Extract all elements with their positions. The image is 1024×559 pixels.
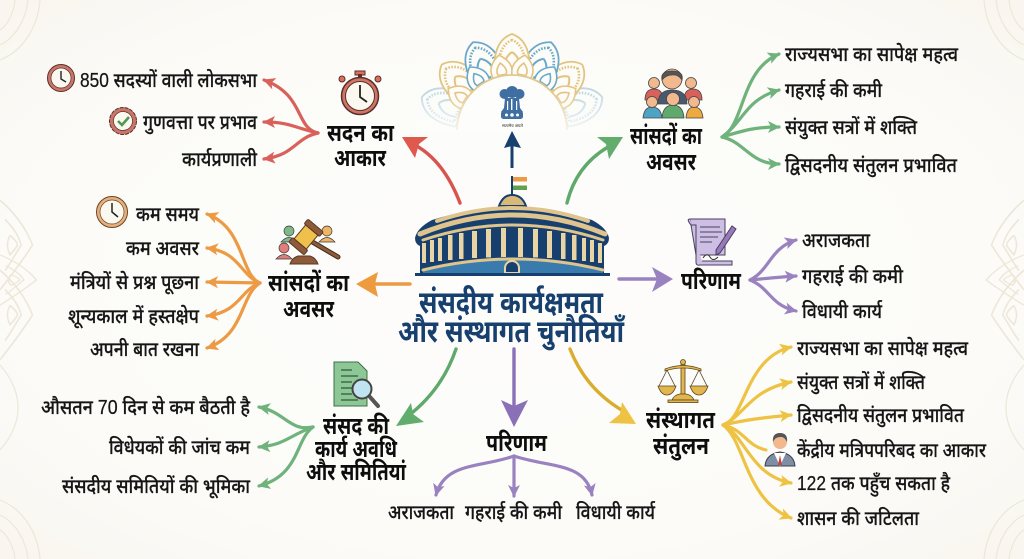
icon: stopwatch (339, 71, 381, 114)
icon: scales (658, 360, 708, 402)
item: संयुक्त सत्रों में शक्ति (797, 370, 925, 395)
arrow: to MP opportunities left (356, 272, 410, 297)
item: कम अवसर (126, 238, 200, 260)
arrow: up navy (504, 131, 521, 168)
icon: scroll and pen (688, 219, 736, 265)
icon: group of people (643, 69, 703, 118)
mandala arch (457, 75, 567, 130)
arrow: to MP opportunities right (567, 137, 623, 203)
title: संसदीय कार्यक्षमता (419, 285, 604, 320)
parliament building (415, 176, 610, 276)
title (398, 285, 626, 351)
item: अराजकता (388, 502, 455, 524)
item: 122 तक पहुँच सकता है (797, 471, 951, 497)
mandala petals (416, 34, 608, 128)
item: राज्यसभा का सापेक्ष महत्व (785, 42, 959, 66)
item: कम समय (136, 204, 200, 226)
heading: सदन का (327, 120, 395, 147)
heading: और समितियां (306, 458, 407, 486)
item: विधेयकों की जांच कम (109, 435, 251, 459)
panel: MP opportunities left (68, 196, 350, 361)
heading: सांसदों का (268, 269, 350, 297)
heading (268, 269, 350, 323)
flag (511, 176, 527, 196)
branch arrows (750, 240, 796, 311)
item: गहराई की कमी (465, 500, 563, 524)
item: विधायी कार्य (576, 500, 656, 524)
item: अराजकता (802, 230, 871, 252)
icon: clock (48, 64, 74, 92)
item: अपनी बात रखना (90, 337, 200, 361)
item: मंत्रियों से प्रश्न पूछना (70, 270, 200, 295)
arrow: to institutional balance (570, 349, 636, 424)
item: औसतन 70 दिन से कम बैठती है (41, 395, 251, 419)
heading (646, 407, 716, 461)
item: गहराई की कमी (802, 264, 904, 288)
heading: सांसदों का (630, 122, 703, 150)
item: संसदीय समितियों की भूमिका (62, 474, 251, 499)
mandala with national emblem (415, 34, 609, 132)
arrow: to sitting and committees (396, 349, 456, 426)
national emblem (500, 86, 524, 128)
panel: institutional balance (646, 336, 987, 530)
heading: अवसर (646, 149, 696, 176)
arrow: to outcome right (619, 267, 673, 292)
panel: outcome bottom (388, 429, 656, 524)
branch arrows (722, 54, 779, 164)
arrow: to house size (402, 137, 460, 203)
item: विधायी कार्य (802, 299, 883, 323)
icon: minister (765, 433, 795, 466)
heading: कार्य अवधि (315, 435, 397, 463)
icon: clock (96, 196, 128, 228)
icon: quality badge (110, 108, 136, 134)
item: कार्यप्रणाली (182, 147, 258, 171)
item: केंद्रीय मत्रिपपरिबद का आकार (797, 438, 987, 462)
branch arrows (207, 214, 260, 348)
item: शून्यकाल में हस्तक्षेप (68, 304, 199, 329)
heading: परिणाम (681, 267, 741, 295)
item: शासन की जटिलता (797, 506, 920, 530)
heading (327, 120, 395, 172)
branch arrows (723, 347, 791, 518)
panel: sittings and committees (41, 362, 407, 499)
panel: outcome right (681, 219, 904, 323)
item: 850 सदस्यों वाली लोकसभा (80, 68, 258, 92)
item: गुणवत्ता पर प्रभाव (143, 112, 258, 135)
item: द्विसदनीय संतुलन प्रभावित (797, 403, 964, 428)
branch arrows (259, 407, 313, 486)
heading (306, 412, 407, 486)
panel: MP opportunities right (630, 42, 959, 178)
heading: संतुलन (653, 433, 710, 461)
item: द्विसदनीय संतुलन प्रभावित (785, 153, 957, 178)
heading: आकार (334, 145, 386, 172)
item: गहराई की कमी (785, 78, 883, 102)
item: संयुक्त सत्रों में शक्ति (785, 115, 917, 140)
branch arrows (264, 80, 318, 159)
icon: document and magnifier (334, 362, 378, 406)
arrow: to outcome bottom (501, 349, 528, 427)
heading: संस्थागत (646, 407, 716, 434)
heading (630, 122, 703, 176)
panel: house size (48, 64, 395, 172)
heading: परिणाम (486, 429, 547, 457)
item: राज्यसभा का सापेक्ष महत्व (797, 336, 969, 360)
icon: gavel and people (276, 219, 338, 264)
heading: अवसर (283, 296, 334, 323)
heading: संसद की (323, 412, 390, 440)
emblem motto: सत्यमेव जयते (502, 122, 524, 128)
title: और संस्थागत चुनौतियाँ (398, 314, 626, 351)
branch arrows (436, 456, 592, 496)
